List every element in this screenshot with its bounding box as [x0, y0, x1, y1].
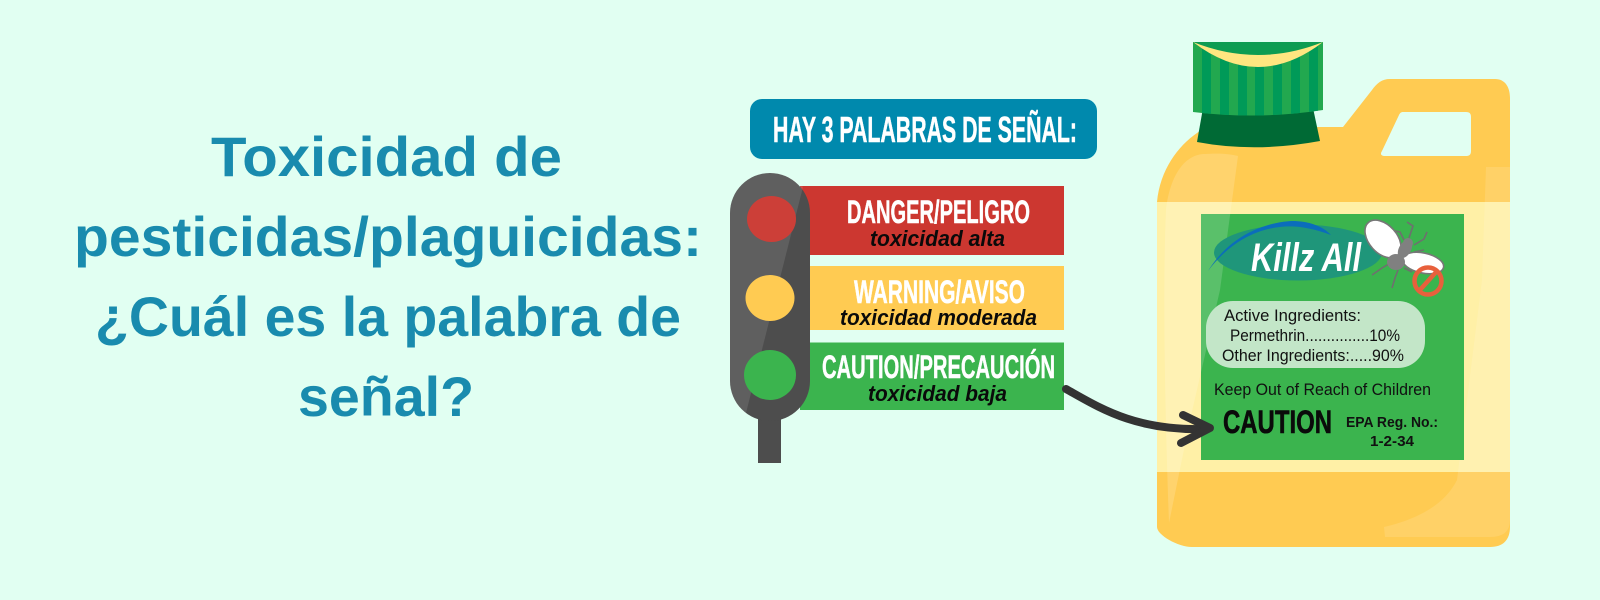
cap neck: [1197, 108, 1320, 147]
warning bar: WARNING/AVISO: [854, 274, 1025, 310]
jug: [1157, 42, 1510, 547]
arrow: [1066, 389, 1210, 443]
warning bar: [808, 266, 1064, 330]
ingredients panel: Permethrin...............10%: [1230, 326, 1400, 345]
ingredients panel: Active Ingredients:: [1224, 306, 1361, 325]
caution bar: CAUTION/PRECAUCIÓN: [822, 349, 1055, 385]
ingredients panel: [1206, 301, 1425, 368]
traffic light: [730, 173, 810, 463]
heading banner: hay 3 palabras de señal: [750, 99, 1097, 159]
title: [74, 125, 702, 428]
jug label band: [1157, 202, 1510, 472]
title: señal?: [298, 365, 474, 428]
epa registration: EPA Reg. No.:: [1346, 414, 1438, 431]
title: ¿Cuál es la palabra de: [95, 285, 681, 348]
ingredients panel: Other Ingredients:.....90%: [1222, 346, 1404, 365]
heading banner: hay 3 palabras de señal: HAY 3 PALABRAS DE SEÑAL:: [773, 108, 1077, 150]
caution bar: [800, 342, 1064, 410]
epa registration: 1-2-34: [1370, 433, 1415, 450]
danger bar: DANGER/PELIGRO: [847, 194, 1030, 230]
danger bar: toxicidad alta: [870, 226, 1005, 251]
icon: fly with prohibition sign: [1358, 213, 1446, 294]
warning bar: toxicidad moderada: [840, 305, 1037, 330]
cap: [1193, 42, 1323, 120]
title: Toxicidad de: [211, 125, 562, 188]
left highlight: [1164, 154, 1238, 523]
epa registration: [1346, 414, 1438, 450]
green label: [1201, 214, 1464, 460]
danger bar: [800, 186, 1064, 255]
jug body: [1157, 79, 1510, 547]
title: pesticidas/plaguicidas:: [74, 205, 702, 268]
infographic canvas: [78, 42, 1510, 547]
right highlight: [1384, 167, 1510, 537]
brand logo: killz all: [1208, 221, 1382, 280]
caution signal word: CAUTION: [1223, 404, 1332, 440]
keep out text: Keep Out of Reach of Children: [1214, 380, 1431, 399]
caution bar: toxicidad baja: [868, 381, 1007, 406]
brand logo: killz all: Killz All: [1251, 236, 1362, 280]
